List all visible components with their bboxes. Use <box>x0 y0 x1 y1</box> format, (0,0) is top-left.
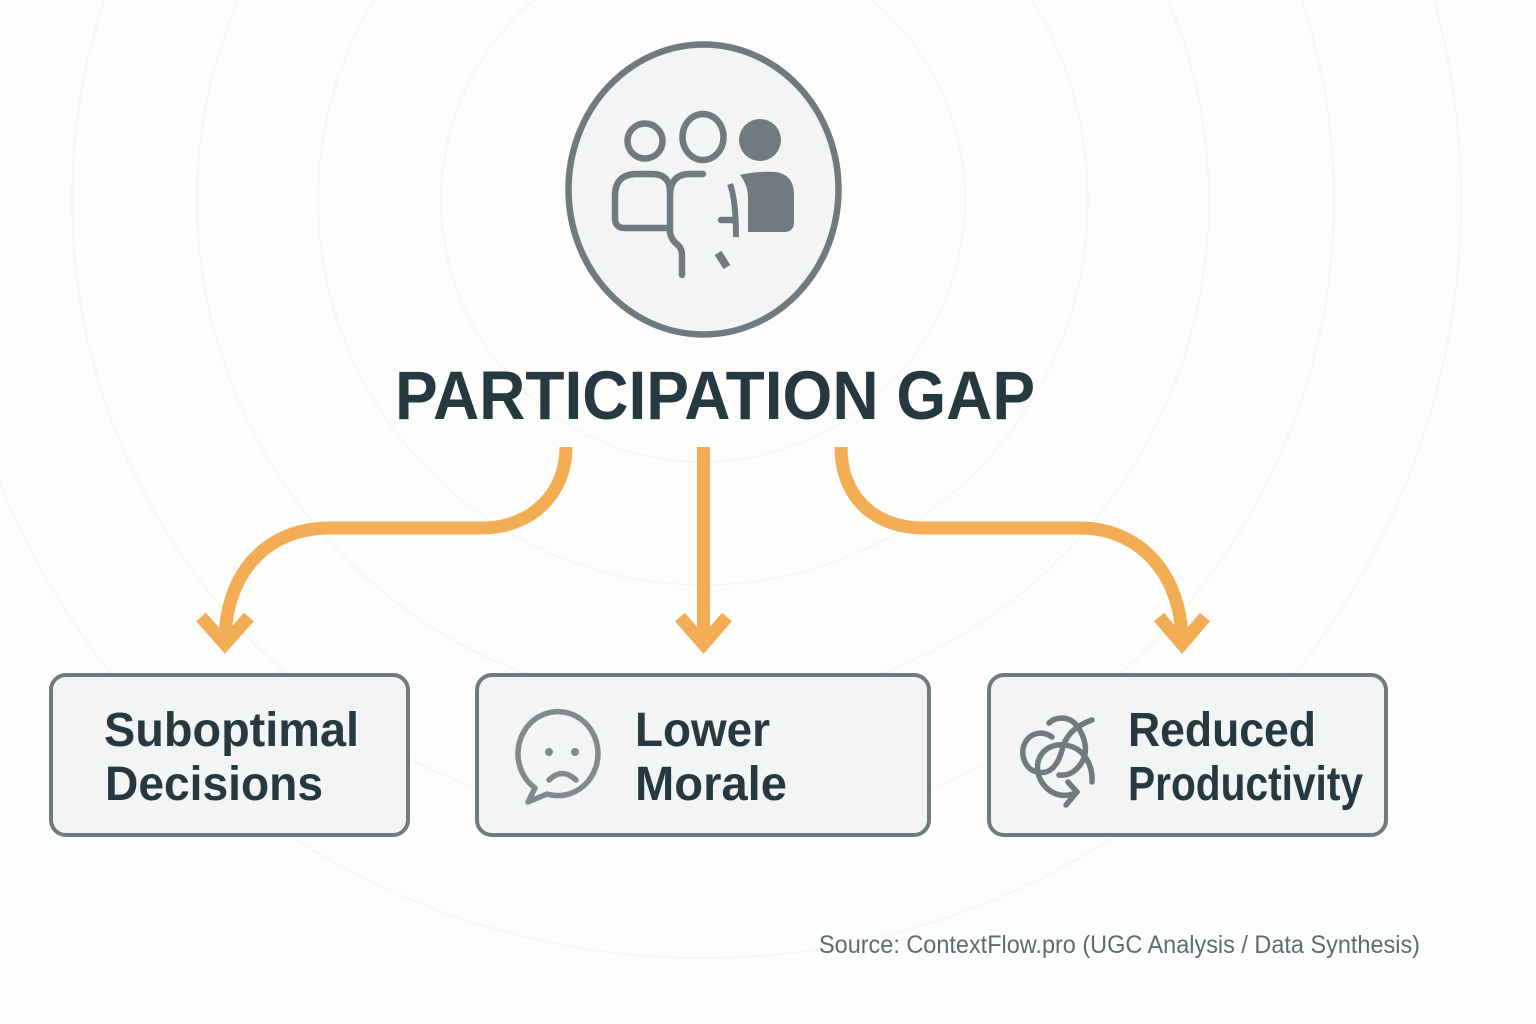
panel: lower morale <box>477 675 929 835</box>
panel: suboptimal decisions <box>51 675 408 835</box>
icon: sad speech bubble <box>518 712 598 802</box>
panel: suboptimal decisions: Decisions <box>105 758 323 811</box>
icon: tangled arrows <box>1023 718 1092 805</box>
arrow: to suboptimal decisions <box>201 447 566 644</box>
panel: lower morale: Lower <box>635 704 770 757</box>
panel: lower morale: Morale <box>635 758 787 811</box>
panel: reduced productivity: Productivity <box>1128 758 1363 811</box>
icon: people in circle <box>568 44 838 334</box>
panel: reduced productivity <box>989 675 1386 835</box>
arrow: to reduced productivity <box>841 447 1205 644</box>
arrow: to lower morale <box>680 447 727 644</box>
source note: Source: ContextFlow.pro (UGC Analysis / Data Synthesis) <box>819 931 1420 959</box>
title: PARTICIPATION GAP <box>395 357 1035 434</box>
panel: suboptimal decisions: Suboptimal <box>104 704 359 757</box>
panel: reduced productivity: Reduced <box>1128 704 1316 757</box>
